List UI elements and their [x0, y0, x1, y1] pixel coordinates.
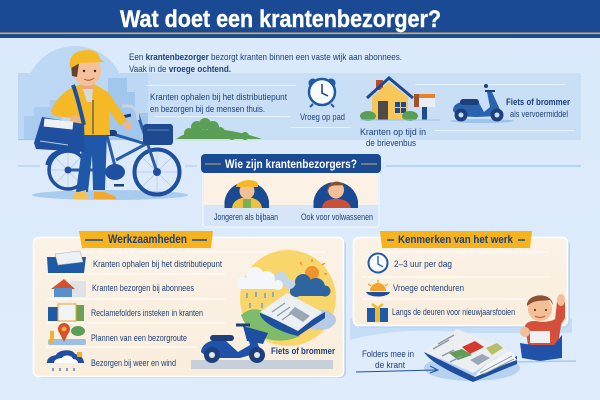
panel: werkzaamheden [34, 231, 346, 378]
row: bezorgroute [48, 323, 187, 345]
icon: scooter [450, 84, 514, 123]
label: brievenbus: Kranten op tijd in [360, 127, 426, 138]
icon: house with mailbox [360, 78, 440, 121]
title: Wat doet een krantenbezorger? [120, 6, 441, 33]
row: nieuwjaarsfooien: Langs de deuren voor nieuwjaarsfooien [392, 307, 515, 318]
head [81, 77, 93, 89]
illustration: child with bag [505, 294, 576, 362]
row: abonnees: Kranten bezorgen bij abonnees [92, 283, 194, 294]
icon: alarm clock [308, 78, 336, 107]
row: abonnees [51, 279, 194, 297]
legs [76, 133, 107, 192]
shoes [74, 190, 87, 199]
band text: ophalen: en bezorgen bij de mensen thuis. [150, 104, 265, 115]
panel: kenmerken van het werk [350, 231, 572, 340]
label: jongeren: Jongeren als bijbaan [214, 212, 278, 223]
bicycle [47, 106, 180, 194]
heading [380, 231, 532, 248]
delivery person with bicycle [18, 50, 197, 200]
jacket [51, 84, 127, 135]
row: weer en wind: Bezorgen bij weer en wind [91, 358, 176, 369]
row: distributiepunt: Kranten ophalen bij het distributiepunt [93, 259, 222, 270]
heading: Kenmerken van het werk [398, 234, 514, 246]
bush landscape [176, 118, 262, 140]
arrow [356, 366, 438, 373]
heading [79, 231, 213, 248]
label: vroeg op pad: Vroeg op pad [300, 112, 345, 123]
intro text: Een krantenbezorger bezorgt kranten binnen een vaste wijk aan abonnees. [129, 52, 402, 63]
row: reclamefolders [48, 304, 203, 321]
info band [146, 73, 581, 140]
illustration: weather [237, 250, 336, 346]
label: folders mee in de krant [362, 349, 414, 371]
label: folders mee in de krant: de krant [375, 360, 405, 371]
row: vroege ochtenduren [366, 280, 464, 296]
panel: wie zijn krantenbezorgers [201, 154, 381, 227]
avatar: volwassene [314, 182, 358, 208]
connector line [386, 165, 581, 167]
row: uren [368, 254, 452, 272]
label: vervoermiddel: als vervoermiddel [510, 109, 568, 120]
row: weer en wind [47, 350, 176, 371]
heading [201, 154, 381, 173]
heading: Werkzaamheden [108, 232, 187, 246]
row: nieuwjaarsfooien [367, 304, 515, 322]
label: volwassenen: Ook voor volwassenen [301, 212, 373, 223]
label: brievenbus [360, 127, 426, 149]
band text: ophalen: Kranten ophalen bij het distributiepunt [150, 92, 287, 103]
row: reclamefolders: Reclamefolders insteken in kranten [91, 308, 203, 319]
intro text [129, 52, 402, 75]
label: folders mee in de krant: Folders mee in [362, 349, 414, 360]
row: distributiepunt [47, 251, 222, 273]
label: brievenbus: de brievenbus [366, 138, 416, 149]
hand [124, 122, 132, 130]
bag [34, 117, 85, 152]
band text: ophalen [150, 92, 287, 115]
hero background: skyline [18, 46, 258, 146]
row: bezorgroute: Plannen van een bezorgroute [91, 333, 187, 344]
avatar: jongere [224, 180, 269, 208]
label: vervoermiddel: Fiets of brommer [506, 97, 570, 108]
title banner [0, 0, 600, 38]
illustration: newspaper [424, 329, 520, 382]
illustration: scooter [191, 325, 333, 369]
row: vroege ochtenduren: Vroege ochtenduren [393, 283, 464, 294]
heading: Wie zijn krantenbezorgers? [225, 159, 357, 171]
row: uren: 2–3 uur per dag [394, 259, 452, 270]
label: vervoermiddel [506, 97, 570, 120]
intro text: Vaak in de vroege ochtend. [129, 64, 231, 75]
label: fiets of brommer: Fiets of brommer [271, 346, 335, 357]
